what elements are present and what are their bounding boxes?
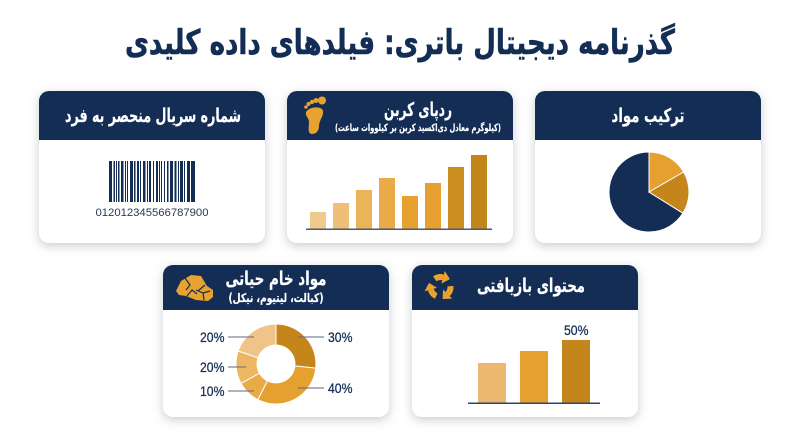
icon: recycle	[422, 271, 457, 303]
donut chart	[236, 324, 316, 404]
panel: critical raw materials	[163, 265, 389, 417]
bar chart: carbon footprint	[306, 155, 492, 230]
donut value labels: 20%	[200, 330, 224, 345]
panel: carbon footprint	[287, 91, 513, 243]
header: material composition	[535, 91, 761, 140]
panel: unique serial number	[39, 91, 265, 243]
subheading: carbon footprint unit: (کیلوگرم معادل دی‌اکسید کربن بر کیلووات ساعت)	[335, 121, 501, 134]
icon: ore rocks	[176, 275, 213, 301]
donut value labels: 40%	[328, 381, 352, 396]
subheading: cobalt, lithium, nickel: (کبالت، لیتیوم، نیکل)	[228, 291, 324, 306]
donut leader lines	[228, 337, 324, 391]
header: unique serial number	[39, 91, 265, 140]
donut value labels	[200, 330, 352, 399]
heading: carbon footprint: ردپای کربن	[384, 99, 452, 121]
donut value labels: 20%	[200, 360, 224, 375]
barcode number: 012012345566787900	[96, 207, 208, 219]
donut value labels: 10%	[200, 384, 224, 399]
header: critical raw materials	[163, 265, 389, 310]
donut value labels: 30%	[328, 330, 352, 345]
header: recycled content	[412, 265, 638, 310]
icon: footprint	[304, 96, 326, 134]
bar chart: recycled content	[468, 323, 600, 404]
panel: material composition	[535, 91, 761, 243]
heading: unique serial number: شماره سریال منحصر به فرد	[65, 105, 241, 127]
panel: recycled content	[412, 265, 638, 417]
value label: 50%	[564, 323, 588, 338]
heading: critical raw materials: مواد خام حیاتی	[226, 268, 326, 290]
heading: recycled content: محتوای بازیافتی	[477, 275, 585, 297]
pie chart	[609, 152, 689, 232]
header: carbon footprint	[287, 91, 513, 140]
heading: material composition: ترکیب مواد	[612, 105, 684, 127]
barcode	[109, 161, 195, 202]
